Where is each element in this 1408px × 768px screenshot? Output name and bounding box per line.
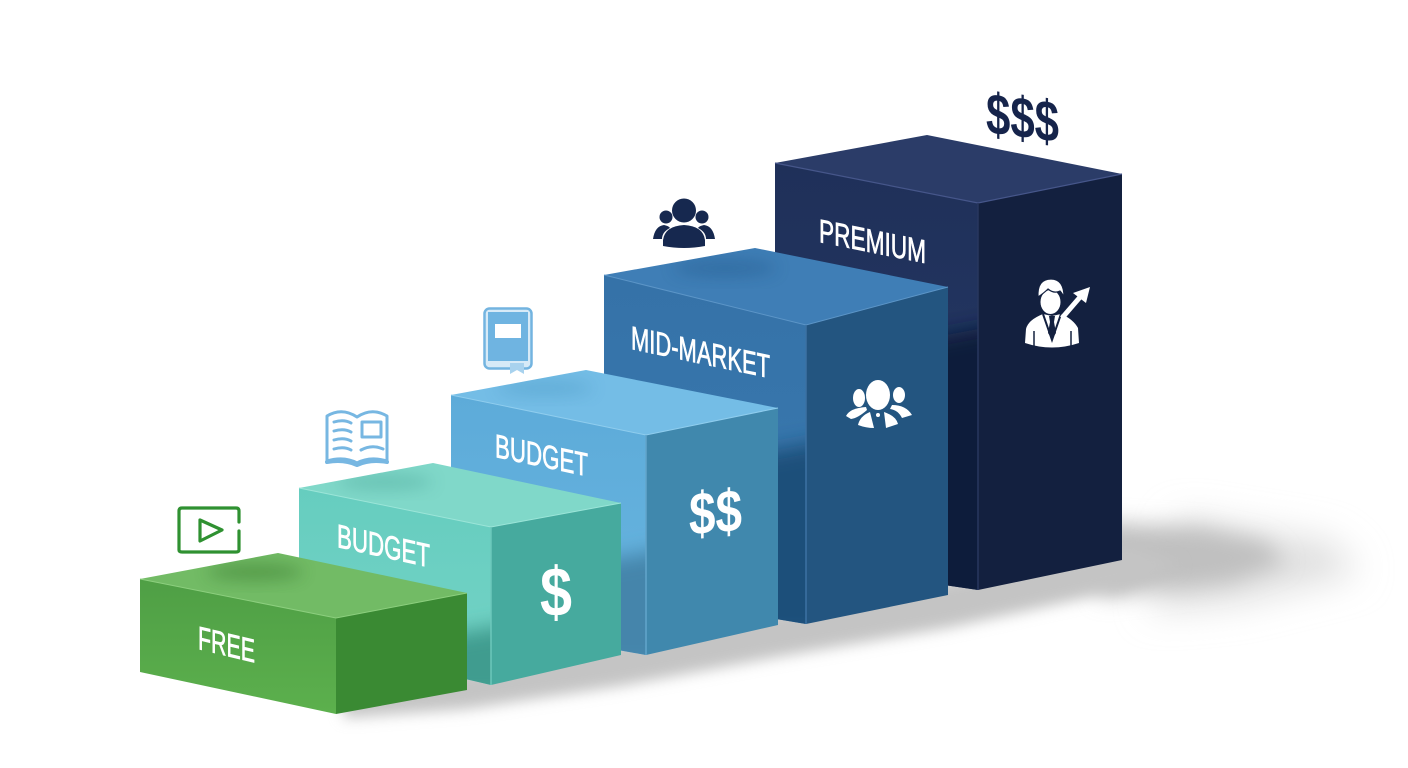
icon: three dollars: $$$ (986, 81, 1059, 155)
label: BUDGET blue: BUDGET (495, 428, 588, 484)
icon: video play (179, 508, 239, 552)
label: FREE: FREE (198, 620, 255, 671)
box: budget teal (299, 463, 621, 700)
icon: businessman with arrow (1025, 279, 1090, 348)
icon: team (846, 380, 912, 428)
icon: three people (653, 198, 715, 248)
box: mid-market (604, 248, 948, 640)
box: premium (775, 135, 1122, 610)
icon: closed book (484, 308, 532, 374)
label: MID-MARKET: MID-MARKET (631, 320, 770, 386)
box: budget blue (451, 370, 778, 670)
icon: open book (327, 412, 387, 465)
staircase infographic (140, 91, 1354, 724)
box: free (140, 553, 467, 714)
label: PREMIUM: PREMIUM (819, 213, 926, 271)
label: BUDGET teal: BUDGET (337, 518, 430, 575)
icon: one dollar: $ (540, 553, 572, 631)
ground shadow (340, 518, 1360, 718)
icon: two dollars: $$ (689, 477, 742, 548)
